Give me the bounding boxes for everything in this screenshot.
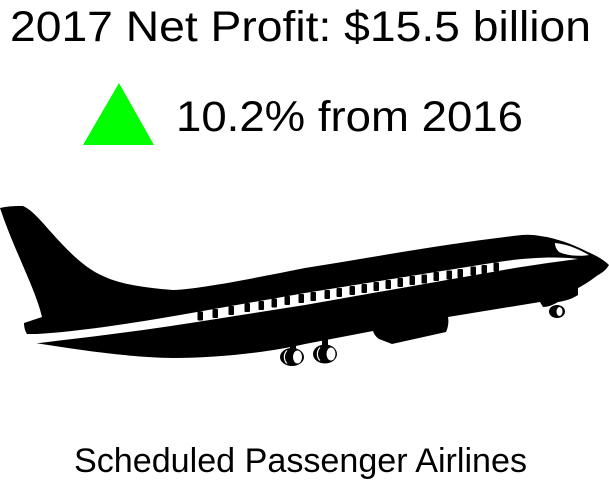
icon: green up triangle — [83, 83, 154, 145]
title: 2017 Net Profit: $15.5 billion — [10, 3, 591, 51]
nose landing gear — [549, 305, 565, 318]
cabin windows — [198, 262, 499, 320]
caption: Scheduled Passenger Airlines — [74, 442, 527, 480]
fuselage and tail — [0, 206, 609, 358]
rear landing gear left — [280, 343, 304, 366]
airplane silhouette — [0, 206, 609, 366]
change from 2016: 10.2% from 2016 — [176, 93, 523, 141]
rear landing gear right — [313, 338, 337, 364]
white cheatline stripe — [24, 258, 578, 345]
cockpit windshield — [555, 243, 589, 256]
